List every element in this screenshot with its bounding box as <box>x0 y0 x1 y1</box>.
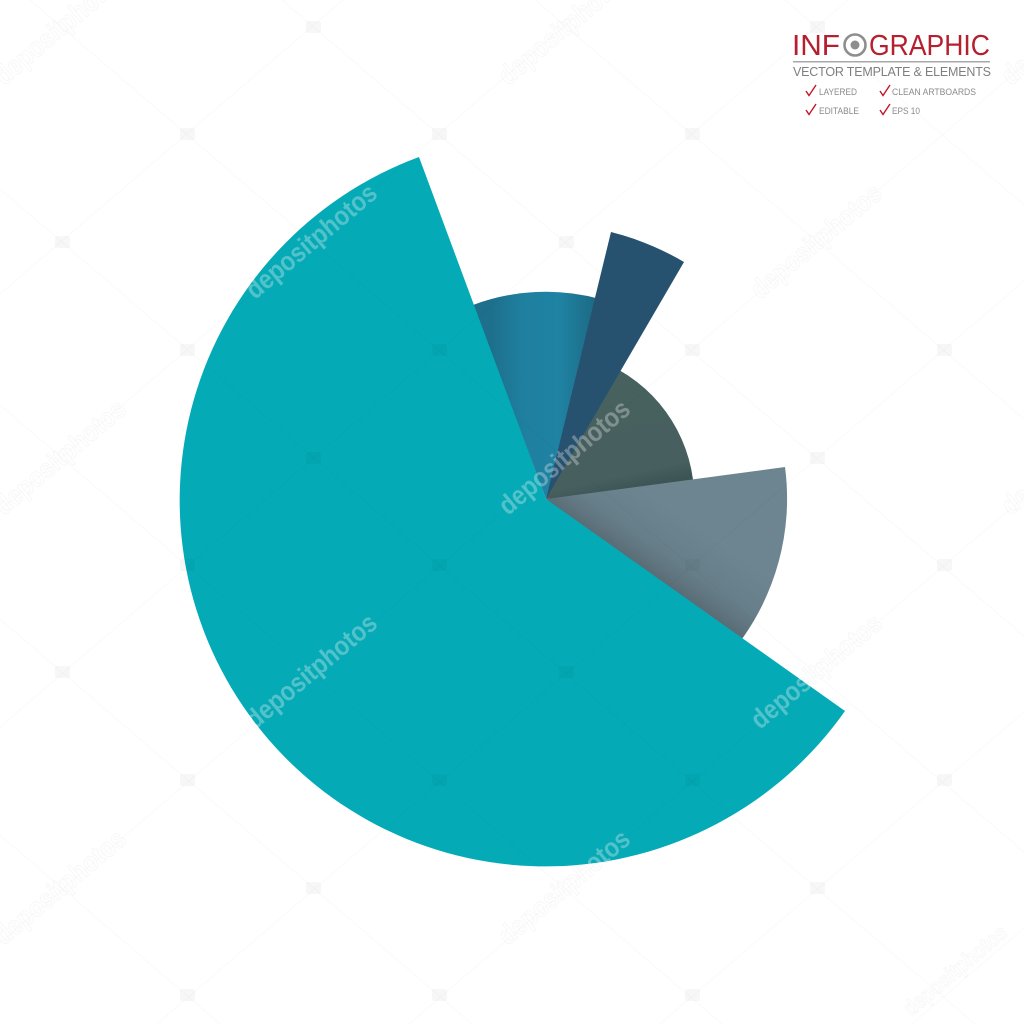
slice: large teal <box>180 157 845 866</box>
watermark text pattern: depositphotos <box>493 394 636 521</box>
slice: dark green-grey <box>546 361 694 499</box>
checklist: LAYERED <box>819 87 857 97</box>
slice: slate grey <box>546 467 787 647</box>
watermark text pattern: depositphotos <box>745 178 888 305</box>
slice: navy <box>546 232 684 499</box>
logo subtitle: VECTOR TEMPLATE & ELEMENTS <box>793 65 991 79</box>
logo title: GRAPHIC <box>869 30 990 62</box>
pie chart <box>180 157 845 866</box>
checklist: CLEAN ARTBOARDS <box>892 87 976 97</box>
logo title: INF <box>792 30 840 62</box>
watermark text pattern: depositphotos <box>745 608 888 735</box>
logo block <box>792 30 991 116</box>
checklist: EPS 10 <box>892 106 920 116</box>
slice: medium blue <box>473 292 600 499</box>
icon: target O <box>844 34 866 56</box>
logo title <box>792 30 990 62</box>
watermark text pattern: depositphotos <box>240 608 383 735</box>
checklist <box>806 85 976 116</box>
watermark text pattern: depositphotos <box>240 178 383 305</box>
checklist: EDITABLE <box>819 106 859 116</box>
watermark text pattern: depositphotos <box>493 824 636 951</box>
